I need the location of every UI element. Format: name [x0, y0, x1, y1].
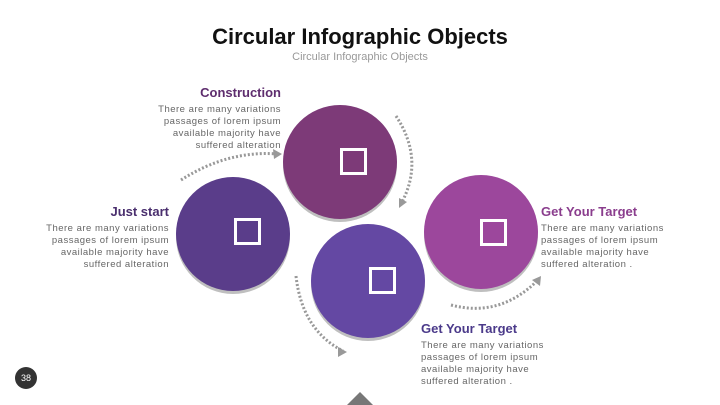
text: get your target right — [541, 204, 664, 270]
subtitle: Circular Infographic Objects — [292, 51, 428, 63]
text: just start — [46, 204, 169, 270]
title: Circular Infographic Objects — [212, 24, 508, 49]
text: get your target right: Get Your Target — [541, 204, 637, 219]
text: get your target bottom: There are many variations — [421, 340, 544, 351]
circle: just start — [176, 177, 290, 291]
text: get your target right: available majority have — [541, 247, 649, 258]
text: get your target bottom: suffered alteration . — [421, 376, 513, 387]
text: get your target right: passages of lorem ipsum — [541, 235, 658, 246]
text: get your target bottom: passages of lorem ipsum — [421, 352, 538, 363]
text: just start: There are many variations — [46, 223, 169, 234]
bottom triangle — [347, 392, 373, 405]
text: get your target bottom: Get Your Target — [421, 321, 517, 336]
text: just start: available majority have — [61, 247, 169, 258]
text: get your target bottom: available majority have — [421, 364, 529, 375]
text: just start: passages of lorem ipsum — [52, 235, 169, 246]
page number: 38 — [21, 373, 31, 383]
circle: get your target right — [424, 175, 538, 289]
circle: construction — [283, 105, 397, 219]
page number — [15, 367, 37, 389]
text: just start: suffered alteration — [84, 259, 169, 270]
text: construction — [158, 85, 281, 151]
text: get your target right: suffered alteration . — [541, 259, 633, 270]
text: construction: There are many variations — [158, 104, 281, 115]
text: get your target right: There are many variations — [541, 223, 664, 234]
text: construction: passages of lorem ipsum — [164, 116, 281, 127]
text: construction: available majority have — [173, 128, 281, 139]
text: construction: suffered alteration — [196, 140, 281, 151]
text: construction: Construction — [200, 85, 281, 100]
text: just start: Just start — [110, 204, 169, 219]
text: get your target bottom — [421, 321, 544, 387]
circle: get your target bottom — [311, 224, 425, 338]
